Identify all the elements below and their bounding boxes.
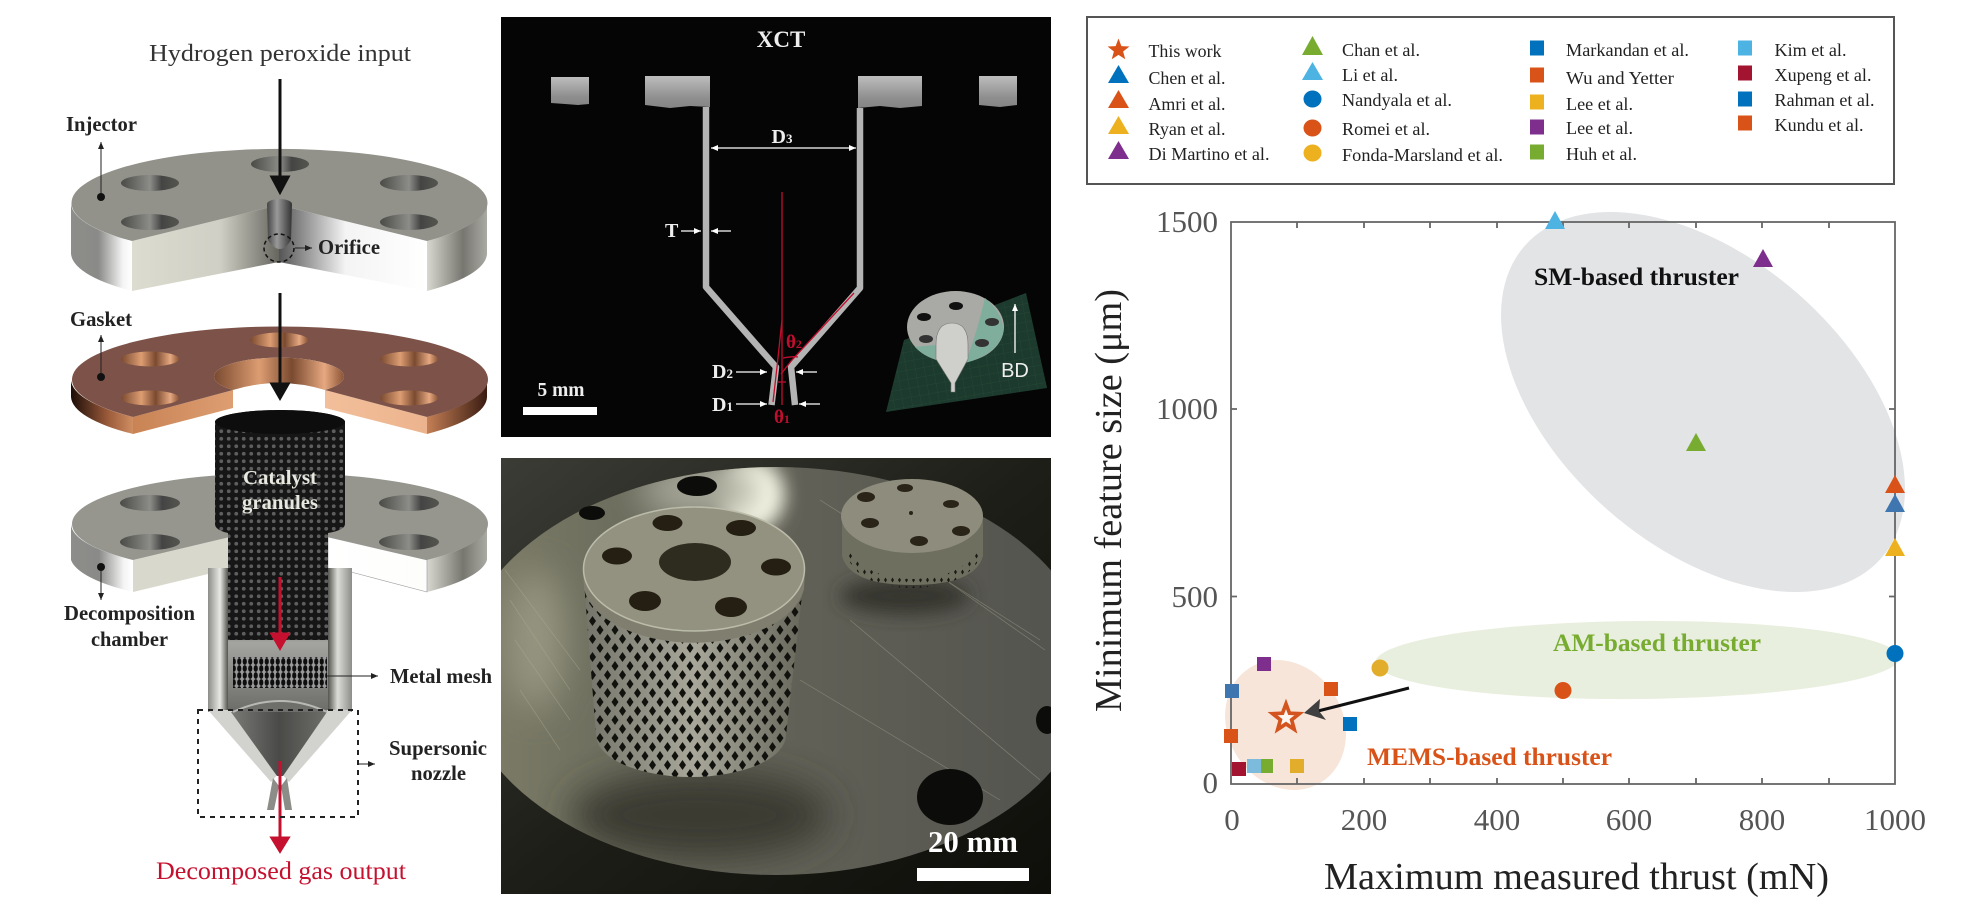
circle data points (1372, 645, 1904, 699)
component: decomposition chamber (71, 473, 488, 810)
dimension: D3: D3 (772, 126, 793, 148)
legend (1087, 17, 1894, 184)
label: granules: granules (242, 492, 318, 514)
label: decomposed gas output: Decomposed gas output (156, 858, 406, 885)
y axis title: Minimum feature size (μm) (1088, 289, 1130, 712)
legend column 3: Lee et al. (1566, 94, 1633, 114)
legend column 4: Kim et al. (1774, 40, 1846, 60)
label: injector: Injector (66, 114, 137, 136)
x axis tick labels: 800 (1739, 802, 1785, 837)
triangle data points (1545, 211, 1905, 556)
region: MEMS-based thruster (1201, 637, 1370, 813)
component: catalyst granules (215, 410, 345, 640)
flange sections (551, 76, 1017, 108)
label: supersonic nozzle (358, 738, 487, 785)
arrow: red decomposition flow (272, 577, 288, 648)
angle label: theta 1: θ1 (774, 407, 790, 428)
label: decomposition chamber: chamber (91, 629, 168, 651)
x axis tick labels: 0 (1224, 802, 1240, 837)
x axis tick labels (1224, 802, 1926, 837)
inset: printed part on build plate: BD (1001, 360, 1029, 382)
scale bar: 5 mm (523, 380, 597, 415)
label: metal mesh: Metal mesh (390, 666, 493, 688)
legend column 1 (1108, 38, 1270, 164)
label: gasket: Gasket (70, 309, 132, 331)
plate holes (579, 476, 1058, 825)
scale bar: 5 mm: 5 mm (538, 380, 584, 401)
y axis tick labels: 1500 (1156, 204, 1218, 239)
red centre and angle lines (773, 192, 854, 405)
dimension: T (665, 220, 731, 242)
x axis tick labels: 400 (1474, 802, 1520, 837)
region label: SM: SM-based thruster (1534, 263, 1739, 291)
legend column 1: Amri et al. (1148, 94, 1226, 114)
build plate (501, 467, 1051, 875)
dimension: T: T (665, 220, 679, 242)
legend column 3 (1530, 40, 1689, 164)
angle label: theta 2: θ2 (786, 332, 802, 353)
label: injector (66, 114, 137, 201)
legend column 4 (1738, 40, 1874, 135)
legend column 2: Fonda-Marsland et al. (1342, 145, 1503, 165)
x axis tick labels: 1000 (1864, 802, 1926, 837)
arrow: input flow upper (272, 79, 288, 192)
legend column 2: Chan et al. (1342, 40, 1420, 60)
data point: this work (1273, 704, 1299, 729)
label: supersonic nozzle: nozzle (411, 763, 466, 785)
legend column 2: Nandyala et al. (1342, 90, 1452, 110)
small lattice cylinder (841, 479, 983, 588)
legend column 4: Rahman et al. (1774, 90, 1874, 110)
region: AM-based thruster (1375, 619, 1900, 701)
legend column 3: Lee et al. (1566, 118, 1633, 138)
region: SM-based thruster (1430, 138, 1975, 666)
legend column 3: Wu and Yetter (1566, 68, 1674, 88)
legend column 1: Ryan et al. (1148, 119, 1226, 139)
scatter chart: thrust vs feature size (1088, 138, 1975, 898)
legend column 3: Markandan et al. (1566, 40, 1689, 60)
label: catalyst: Catalyst (243, 467, 317, 489)
plot frame and ticks (1231, 222, 1895, 784)
legend column 1: Chen et al. (1148, 68, 1226, 88)
legend column 4: Xupeng et al. (1774, 65, 1872, 85)
y axis tick labels: 500 (1172, 579, 1218, 614)
x axis title: Maximum measured thrust (mN) (1324, 856, 1829, 898)
dimension: D1 (712, 394, 820, 416)
component: injector (71, 149, 487, 291)
dimension: D2: D2 (712, 361, 733, 383)
label: decomposition chamber: Decomposition (64, 603, 196, 625)
dimension: D1: D1 (712, 394, 733, 416)
arrow: to this work (1304, 688, 1409, 720)
nozzle wall profile (706, 107, 860, 405)
panel: photograph of printed parts (501, 458, 1051, 894)
legend column 2: Li et al. (1342, 65, 1398, 85)
label: hydrogen peroxide input: Hydrogen peroxide input (149, 41, 411, 67)
legend column 3: Huh et al. (1566, 144, 1637, 164)
large lattice cylinder (583, 507, 805, 777)
arrow: input flow lower (272, 293, 288, 398)
dashed box: nozzle (198, 710, 358, 817)
y axis tick labels: 0 (1202, 765, 1218, 800)
legend column 2: Romei et al. (1342, 119, 1430, 139)
panel: thruster exploded view (64, 41, 493, 885)
legend column 4: Kundu et al. (1774, 115, 1864, 135)
component: gasket (71, 327, 488, 434)
arrow: red output flow (272, 761, 288, 851)
region label: AM: AM-based thruster (1553, 629, 1761, 657)
scale bar: 20 mm (917, 832, 1029, 881)
dimension: D2 (712, 361, 817, 383)
square data points (1224, 657, 1357, 776)
component: metal mesh (233, 657, 327, 688)
x axis tick labels: 600 (1606, 802, 1652, 837)
y axis tick labels: 1000 (1156, 391, 1218, 426)
label: orifice: Orifice (318, 237, 380, 259)
legend column 1: This work (1148, 41, 1222, 61)
legend column 1: Di Martino et al. (1148, 144, 1270, 164)
panel: XCT cross-section (501, 17, 1051, 437)
x axis tick labels: 200 (1341, 802, 1387, 837)
label: gasket (70, 309, 132, 381)
inset: printed part on build plate (886, 291, 1047, 412)
heading: XCT: XCT (757, 27, 805, 52)
scale bar: 20 mm: 20 mm (928, 824, 1018, 859)
label: supersonic nozzle: Supersonic (389, 738, 487, 760)
y axis tick labels (1156, 204, 1218, 800)
label: decomposition chamber (64, 563, 196, 651)
legend column 2 (1302, 36, 1503, 165)
region label: MEMS: MEMS-based thruster (1367, 743, 1612, 771)
